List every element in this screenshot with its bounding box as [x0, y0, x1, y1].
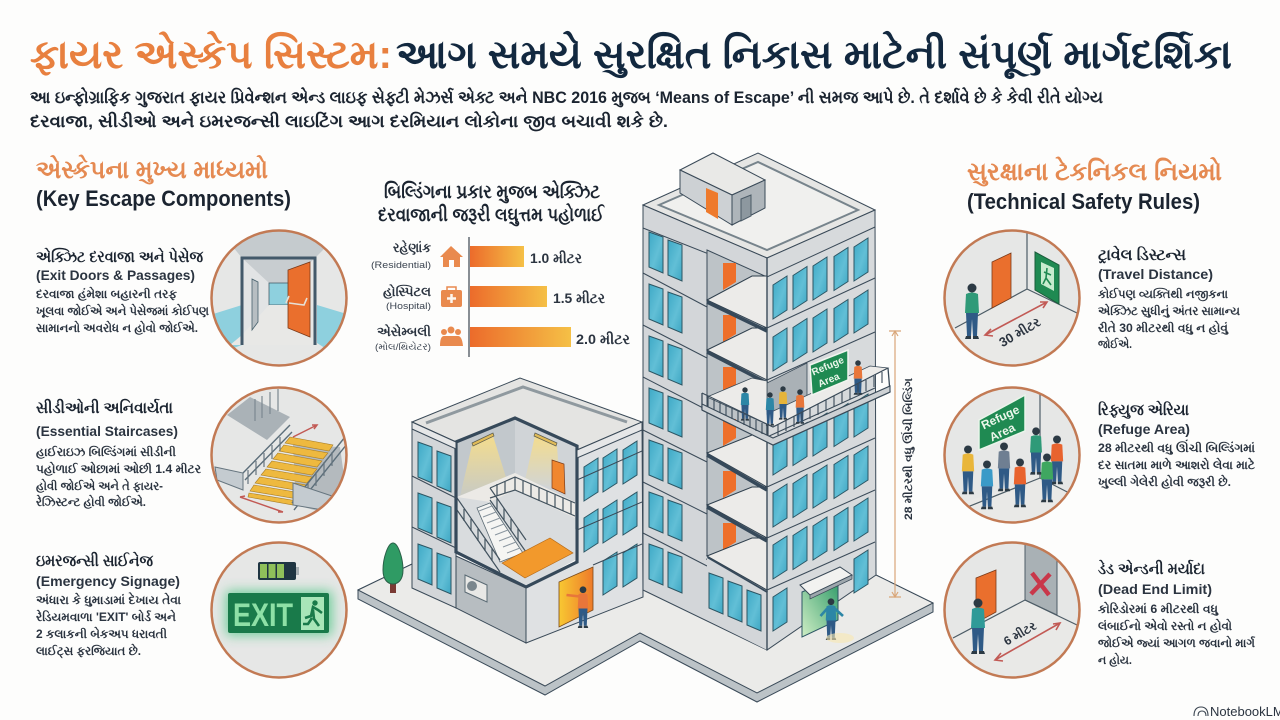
height dimension [889, 331, 915, 597]
icon: travel distance: 30 મીટર [996, 313, 1043, 350]
refuge sign [979, 395, 1025, 450]
platform base [358, 540, 933, 702]
title: આગ સમયે સુરક્ષિત નિકાસ માટેની સંપૂર્ણ માર્ગદર્શિકા [396, 31, 1232, 80]
roof [412, 378, 642, 452]
title: ફાયર એસ્કેપ સિસ્ટમ: [30, 31, 392, 77]
bar: assembly: એસેમ્બલી [377, 323, 431, 339]
icon: air conditioner [465, 575, 487, 602]
right wall windows [773, 238, 868, 631]
person at door [566, 586, 588, 628]
intro text: દરવાજા, સીડીઓ અને ઇમરજન્સી લાઇટિંગ આગ દરમિયાન લોકોના જીવ બચાવી શકે છે. [30, 110, 668, 132]
stairs [457, 488, 526, 572]
heading: technical safety rules: (Technical Safety Rules) [967, 189, 1200, 214]
text: dead end limit: (Dead End Limit) [1098, 581, 1212, 597]
text: refuge area: ખુલ્લી ગેલેરી હોવી જરૂરી છે. [1098, 474, 1231, 490]
refuge sign: Refuge [810, 355, 846, 378]
glowing exit door [559, 567, 593, 627]
icon: refuge area group [940, 385, 1085, 530]
bar: hospital: (Hospital) [386, 301, 431, 312]
chart title [378, 180, 605, 226]
text: exit doors: ખૂલવા જોઈએ અને પેસેજમાં કોઈપણ [36, 303, 210, 320]
icon: dead end limit [940, 540, 1085, 685]
recessed balconies with orange doors [707, 250, 767, 650]
bar: hospital: 1.5 મીટર [553, 290, 606, 306]
bar: residential [371, 239, 583, 271]
text: refuge area: (Refuge Area) [1098, 421, 1190, 437]
refuge sign: Area [987, 420, 1018, 444]
text: dead end limit: જોઈએ જ્યાં આગળ જવાનો માર્ગ [1098, 635, 1256, 650]
roof [643, 153, 875, 258]
left wall windows [649, 232, 682, 593]
text: travel distance: ટ્રાવેલ ડિસ્ટન્સ [1098, 244, 1186, 265]
railing [702, 368, 890, 445]
bar: assembly: 2.0 મીટર [576, 331, 631, 347]
text: signage: અંધારા કે ધુમાડામાં દેખાય તેવા [36, 591, 181, 608]
lower wall [456, 556, 526, 643]
text: staircases: સીડીઓની અનિવાર્યતા [36, 397, 173, 417]
text: staircases [36, 397, 202, 509]
low building with cutaway [412, 378, 643, 643]
bar: assembly [375, 323, 631, 353]
text: travel distance: (Travel Distance) [1098, 266, 1213, 282]
text: travel distance [1098, 244, 1240, 351]
tall building [643, 153, 876, 650]
text: travel distance: જોઈએ. [1098, 336, 1132, 351]
text: exit doors: સામાનનો અવરોધ ન હોવો જોઈએ. [36, 320, 198, 335]
chart title: બિલ્ડિંગના પ્રકાર મુજબ એક્ઝિટ [384, 180, 600, 203]
text: dead end limit [1098, 558, 1256, 667]
icon: dead end limit: 6 મીટર [1001, 617, 1039, 648]
text: signage: રેડિયમવાળા 'EXIT' બોર્ડ અને [36, 609, 176, 624]
text: dead end limit: ડેડ એન્ડની મર્યાદા [1098, 558, 1205, 578]
text: staircases: રેઝિસ્ટન્ટ હોવી જોઈએ. [36, 494, 146, 509]
bar: hospital [383, 283, 606, 312]
roof stair room [680, 153, 765, 225]
cutaway interior [456, 418, 577, 587]
icon: yellow staircase [210, 385, 350, 525]
text: exit doors: (Exit Doors & Passages) [36, 267, 195, 283]
heading: key escape components: (Key Escape Components) [36, 186, 291, 211]
text: refuge area: રિફ્યુજ એરિયા [1098, 399, 1189, 420]
refuge area balcony [702, 350, 890, 445]
text: dead end limit: લંબાઈનો એવો રસ્તો ન હોવો [1098, 618, 1232, 633]
bar: residential: રહેણાંક [393, 239, 432, 255]
intro text: આ ઇન્ફોગ્રાફિક ગુજરાત ફાયર પ્રિવેન્શન એન્ડ લાઇફ સેફ્ટી મેઝર્સ એક્ટ અને NBC 2016 મુજબ ‘Means of Escape’ ની સમજ આપે છે. તે દર્શાવે છે કે કેવી રીતે યોગ્ય [30, 86, 1103, 108]
heading: key escape components: એસ્કેપના મુખ્ય માધ્યમો [36, 155, 268, 185]
text: signage: લાઈટ્સ ફરજિયાત છે. [36, 643, 141, 660]
text: signage: (Emergency Signage) [36, 573, 180, 589]
heading: key escape components [36, 155, 291, 211]
text: travel distance: કોઈપણ વ્યક્તિથી નજીકના [1098, 286, 1228, 302]
battery [258, 562, 299, 580]
text: signage [36, 550, 181, 660]
bar: residential: (Residential) [371, 260, 431, 271]
text: staircases: પહોળાઈ ઓછામાં ઓછી 1.4 મીટર [36, 461, 202, 476]
text: staircases: (Essential Staircases) [36, 423, 178, 439]
running man pictogram [301, 597, 324, 630]
text: exit doors: દરવાજા હંમેશા બહારની તરફ [36, 286, 177, 301]
bar: assembly: (મોલ/થિયેટર) [375, 340, 431, 353]
icon: travel distance [940, 225, 1085, 370]
text: refuge area: દર સાતમા માળે આશરો લેવા માટે [1098, 457, 1255, 472]
icon: corridor with exit door [210, 230, 350, 370]
text: refuge area [1098, 399, 1255, 490]
title [30, 31, 1232, 80]
text: refuge area: 28 મીટરથી વધુ ઊંચી બિલ્ડિંગમાં [1098, 439, 1255, 456]
text: staircases: હોવી જોઈએ અને તે ફાયર- [36, 478, 163, 493]
gallery railing [490, 477, 575, 516]
bar: hospital: હોસ્પિટલ [383, 283, 431, 299]
chart title: દરવાજાની જરૂરી લઘુત્તમ પહોળાઈ [378, 203, 605, 226]
bar chart: exit door width [371, 237, 631, 357]
text: signage: 2 કલાકની બેકઅપ ધરાવતી [36, 626, 168, 641]
people on balcony [741, 360, 862, 426]
refuge sign: Refuge [979, 402, 1022, 432]
windows [418, 441, 637, 595]
text: signage: ઇમરજન્સી સાઈનેજ [36, 550, 154, 570]
text: travel distance: એક્ઝિટ સુધીનું અંતર સામાન્ય [1098, 303, 1240, 319]
bar: residential: 1.0 મીટર [530, 250, 583, 266]
text: staircases: હાઈરાઇઝ બિલ્ડિંગમાં સીડીની [36, 444, 177, 459]
intro text [30, 86, 1103, 132]
text: travel distance: રીતે 30 મીટરથી વધુ ન હોવું [1098, 320, 1229, 336]
height dimension: 28 મીટરથી વધુ ઊંચી બિલ્ડિંગ [900, 378, 915, 520]
heading: technical safety rules: સુરક્ષાના ટેકનિકલ નિયમો [967, 157, 1222, 187]
icon: glowing exit sign with battery: EXIT [233, 597, 293, 633]
ground exit door and canopy [800, 567, 852, 637]
refuge sign [810, 350, 848, 395]
text: exit doors [36, 246, 210, 335]
tree [383, 543, 403, 593]
text: dead end limit: ન હોય. [1098, 652, 1132, 667]
running person [820, 598, 843, 640]
heading: technical safety rules [967, 157, 1222, 214]
refuge sign: Area [817, 371, 842, 390]
icon: glowing exit sign with battery [212, 542, 346, 678]
text: exit doors: એક્ઝિટ દરવાજા અને પેસેજ [36, 246, 204, 266]
text: dead end limit: કોરિડોરમાં 6 મીટરથી વધુ [1098, 601, 1219, 617]
